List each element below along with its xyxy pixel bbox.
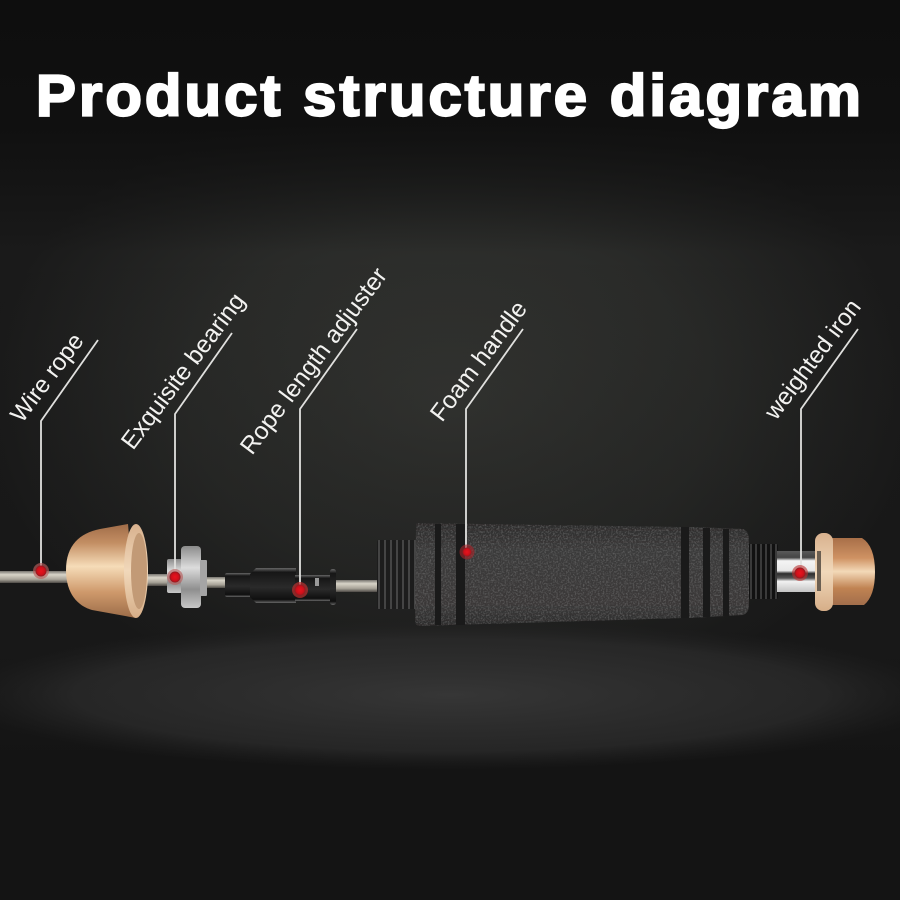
- part: weighted iron: [777, 533, 875, 611]
- wire rope segments: [0, 571, 380, 592]
- callout: Exquisite bearing: Exquisite bearing: [116, 288, 251, 455]
- part: foam handle: [377, 523, 778, 626]
- grip grooves: [435, 524, 729, 625]
- foam grip: [415, 523, 749, 626]
- title: Product structure diagram: [36, 64, 864, 128]
- callout: Wire rope: [5, 328, 98, 579]
- callout: weighted iron: weighted iron: [759, 294, 867, 425]
- part: rope length adjuster: [225, 568, 336, 605]
- callout: Rope length adjuster: Rope length adjuster: [235, 263, 393, 460]
- callout: Wire rope: Wire rope: [5, 328, 89, 428]
- part: bearing: [167, 546, 207, 608]
- callout: Foam handle: Foam handle: [425, 296, 533, 427]
- part: left gold end cap: [66, 524, 148, 618]
- callout: Exquisite bearing: [116, 288, 251, 585]
- left thread: [377, 540, 417, 609]
- callout: Rope length adjuster: [235, 263, 393, 598]
- callout: Foam handle: [425, 296, 533, 560]
- callout: weighted iron: [759, 294, 867, 581]
- right thread: [748, 544, 778, 599]
